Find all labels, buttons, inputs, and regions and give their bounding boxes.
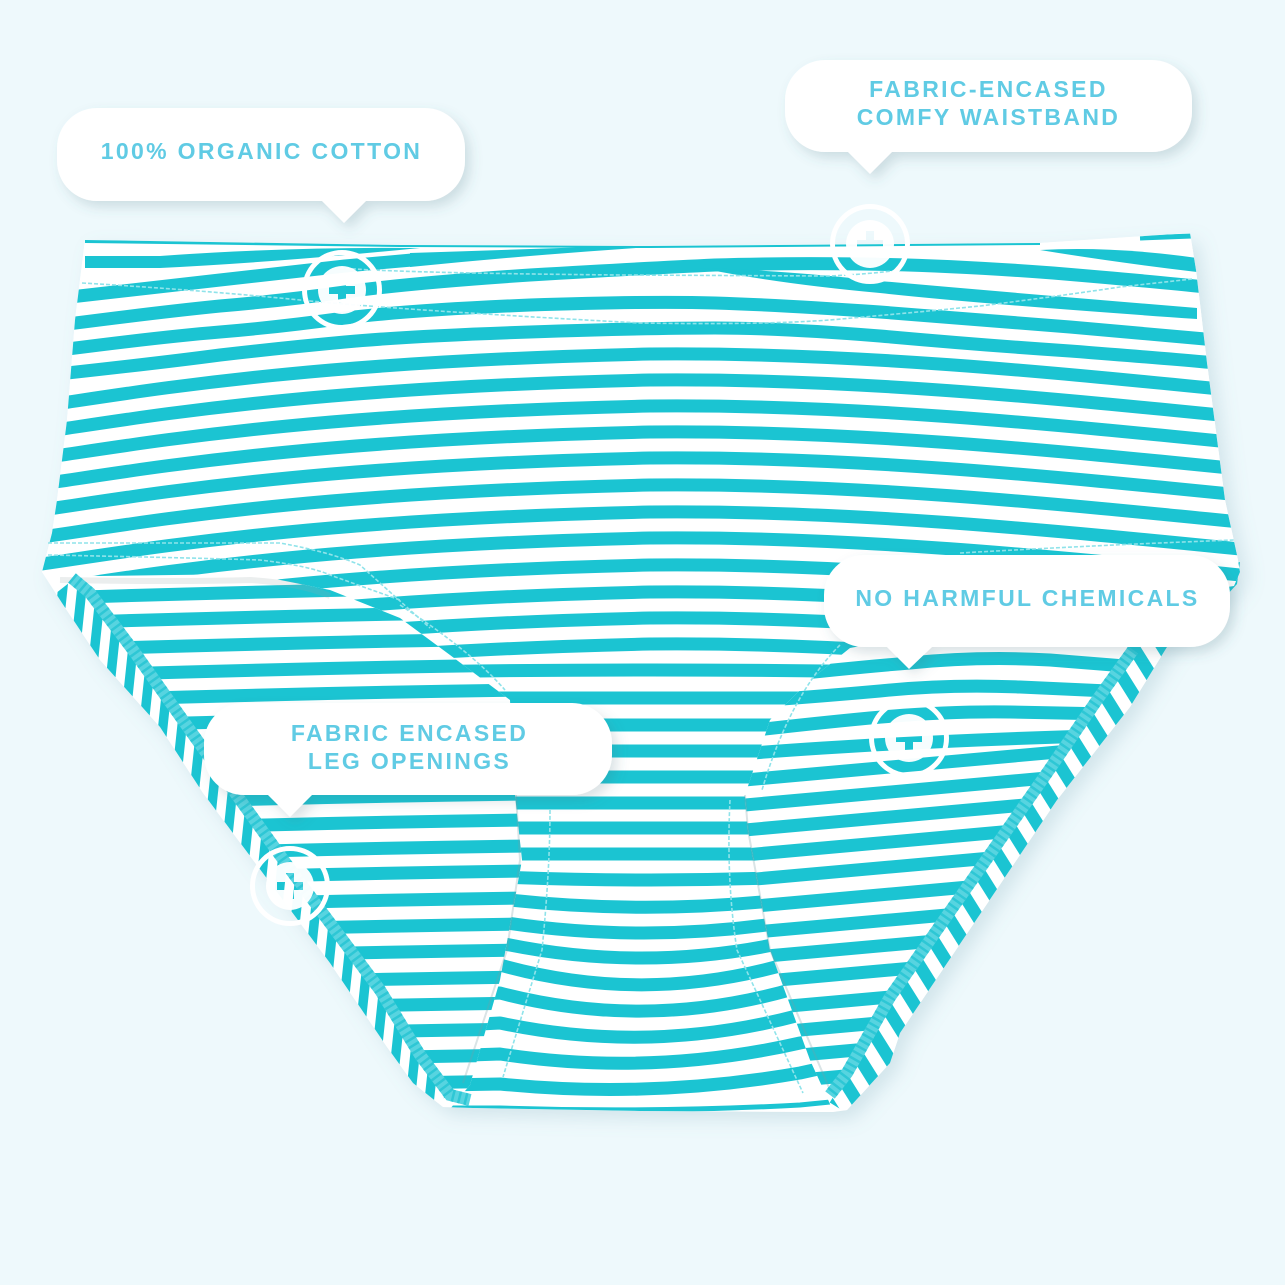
callout: fabric-encased comfy waistband <box>785 60 1192 174</box>
hotspot marker: organic cotton <box>304 252 380 328</box>
waistband stitching <box>48 268 1234 790</box>
waistband fold edge <box>60 580 330 596</box>
callout: 100% organic cotton <box>57 108 465 223</box>
callout: fabric encased leg openings: FABRIC ENCASED <box>291 720 528 746</box>
front panel and waistband <box>42 234 1240 1112</box>
callout: 100% organic cotton: 100% ORGANIC COTTON <box>101 138 422 164</box>
right outer leg band <box>845 635 1155 1112</box>
hotspot marker: waistband <box>832 206 908 282</box>
right leg stripes <box>745 652 1119 1085</box>
garment silhouette <box>42 233 1240 1112</box>
left leg piping <box>72 578 470 1100</box>
callout: no harmful chemicals: NO HARMFUL CHEMICALS <box>855 585 1200 611</box>
callout: fabric encased leg openings <box>204 703 612 817</box>
callout: fabric-encased comfy waistband: FABRIC-ENCASED <box>869 76 1108 102</box>
callout: fabric encased leg openings: LEG OPENINGS <box>308 748 511 774</box>
hotspot marker: leg openings <box>252 848 328 924</box>
waistband stripes <box>20 236 1250 1110</box>
right waistband tip shade <box>1205 562 1240 608</box>
hotspot marker: chemicals <box>872 700 946 776</box>
left leg stripes <box>95 584 522 1089</box>
gusset stripes <box>400 670 900 672</box>
right leg piping <box>830 650 1133 1095</box>
callout: no harmful chemicals <box>824 555 1230 669</box>
callout: fabric-encased comfy waistband: COMFY WAISTBAND <box>857 104 1120 130</box>
left outer leg band <box>60 590 432 1107</box>
garment: striped briefs <box>42 233 1250 1124</box>
gusset seams <box>463 795 830 1093</box>
